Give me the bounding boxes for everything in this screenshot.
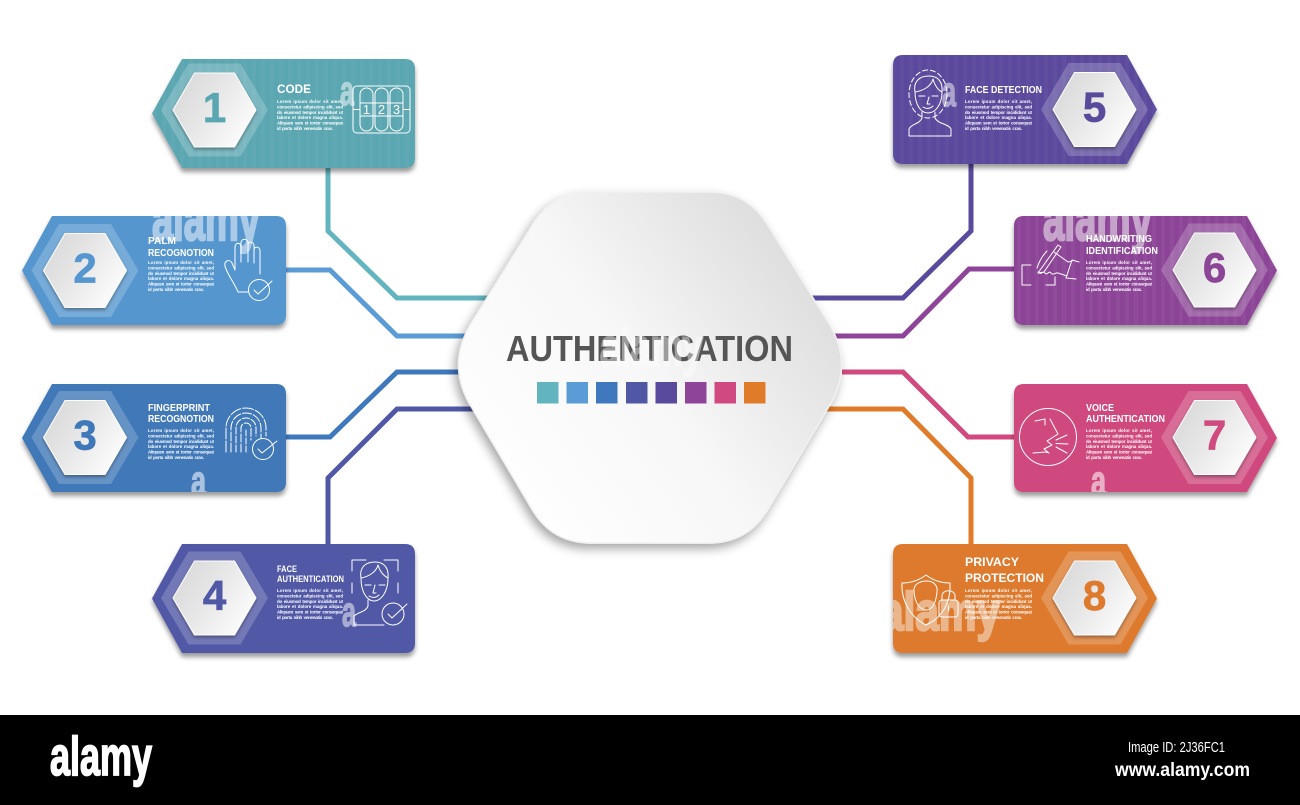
number badge 8: 8 <box>1083 572 1106 619</box>
connector 4 <box>328 409 480 544</box>
icon: speaking face <box>1020 408 1076 466</box>
title 6 <box>1086 234 1158 257</box>
body text 4: do eiusmod tempor incididunt ut <box>277 599 344 604</box>
body text 5: Aliquam sem et tortor consequat <box>965 121 1033 126</box>
body text 6: consectetur adipiscing elit, sed <box>1086 265 1152 270</box>
body text 1: Lorem ipsum dolor sit amet, <box>277 99 343 104</box>
card 2: palm recognition <box>20 216 289 332</box>
title 5: FACE DETECTION <box>965 84 1042 96</box>
body text 1: Aliquam sem et tortor consequat <box>277 121 344 126</box>
body text 8: consectetur adipiscing elit, sed <box>965 593 1032 598</box>
body text 1: consectetur adipiscing elit, sed <box>277 104 343 109</box>
body text 4: Aliquam sem et tortor consequat <box>277 610 344 615</box>
body text 7: labore et dolore magna aliqua. <box>1086 444 1152 449</box>
title 3: FINGERPRINT <box>148 403 210 414</box>
body text 6 <box>1086 260 1153 292</box>
body text 7 <box>1086 428 1153 460</box>
body text 5: Lorem ipsum dolor sit amet, <box>965 99 1032 104</box>
icon: face scan with check <box>352 560 407 625</box>
connector 5 <box>810 164 971 298</box>
body text 6: do eiusmod tempor incididunt ut <box>1086 271 1153 276</box>
body text 3: id porta nibh venenatis cras. <box>148 455 204 460</box>
icon: code lock: 1 <box>363 102 370 117</box>
title 2: PALM <box>148 236 176 247</box>
body text 3: Aliquam sem et tortor consequat <box>148 450 215 455</box>
watermark alamy: alamy <box>1043 185 1152 254</box>
number badge 6: 6 <box>1203 244 1226 291</box>
icon: face detection <box>909 70 951 136</box>
body text 3: labore et dolore magna aliqua. <box>148 444 214 449</box>
title 7 <box>1086 403 1165 425</box>
title 6: HANDWRITING <box>1086 234 1152 245</box>
title 8 <box>965 555 1044 585</box>
number badge 5: 5 <box>1083 84 1106 130</box>
watermark alamy: alamy <box>152 185 260 254</box>
body text 3: do eiusmod tempor incididunt ut <box>148 439 215 444</box>
main title: AUTHENTICATION <box>506 328 793 369</box>
central hexagon <box>458 192 842 543</box>
connector lines <box>286 164 1014 544</box>
body text 3: Lorem ipsum dolor sit amet, <box>148 428 214 433</box>
body text 4: labore et dolore magna aliqua. <box>277 604 343 609</box>
card 4: face authentication <box>152 544 415 653</box>
title 4: FACE <box>277 564 297 574</box>
body text 7: Aliquam sem et tortor consequat <box>1086 450 1153 455</box>
title 2: RECOGNOTION <box>148 248 214 259</box>
body text 4: consectetur adipiscing elit, sed <box>277 593 343 598</box>
body text 2: id porta nibh venenatis cras. <box>148 287 204 292</box>
connector 6 <box>830 269 1014 336</box>
body text 5: labore et dolore magna aliqua. <box>965 115 1032 120</box>
title 8: PROTECTION <box>965 571 1044 585</box>
body text 6: Aliquam sem et tortor consequat <box>1086 282 1153 287</box>
body text 1: do eiusmod tempor incididunt ut <box>277 110 344 115</box>
number badge 2 <box>32 224 138 317</box>
body text 2: consectetur adipiscing elit, sed <box>148 265 214 270</box>
footer bar <box>0 715 1300 805</box>
icon: palm with check <box>225 239 272 300</box>
card 3: fingerprint recognition <box>22 384 286 504</box>
body text 1: labore et dolore magna aliqua. <box>277 115 343 120</box>
number badge 3 <box>32 391 138 484</box>
body text 1 <box>277 99 344 131</box>
connector 7 <box>842 372 1014 437</box>
watermark alamy: alamy <box>600 319 703 377</box>
body text 3: consectetur adipiscing elit, sed <box>148 433 214 438</box>
body text 6: labore et dolore magna aliqua. <box>1086 276 1152 281</box>
website: www.alamy.com <box>1114 760 1250 781</box>
body text 4: Lorem ipsum dolor sit amet, <box>277 588 343 593</box>
body text 6: id porta nibh venenatis cras. <box>1086 287 1142 292</box>
body text 5 <box>965 99 1033 131</box>
body text 8: do eiusmod tempor incididunt ut <box>965 599 1033 604</box>
number badge 6 <box>1161 224 1268 316</box>
title 3: RECOGNOTION <box>148 414 214 425</box>
body text 8 <box>965 588 1033 620</box>
body text 4 <box>277 588 344 620</box>
body text 7: consectetur adipiscing elit, sed <box>1086 433 1152 438</box>
body text 7: id porta nibh venenatis cras. <box>1086 455 1142 460</box>
title 7: VOICE <box>1086 403 1114 414</box>
connector 8 <box>825 409 971 544</box>
icon: code lock: 3 <box>393 102 400 117</box>
watermark a: a <box>1091 457 1106 504</box>
title 4 <box>277 564 344 584</box>
title 7: AUTHENTICATION <box>1086 414 1165 425</box>
body text 8: Aliquam sem et tortor consequat <box>965 610 1033 615</box>
number badge 1: 1 <box>203 84 226 131</box>
body text 5: do eiusmod tempor incididunt ut <box>965 110 1033 115</box>
title 2 <box>148 236 214 259</box>
body text 2 <box>148 260 215 292</box>
watermark a: a <box>342 588 356 635</box>
connector 2 <box>286 270 475 336</box>
number badge 4 <box>161 552 268 644</box>
title 8: PRIVACY <box>965 555 1019 569</box>
body text 6: Lorem ipsum dolor sit amet, <box>1086 260 1152 265</box>
body text 5: consectetur adipiscing elit, sed <box>965 104 1032 109</box>
icon: code lock <box>353 86 410 133</box>
card 8: privacy protection <box>880 544 1157 653</box>
body text 2: labore et dolore magna aliqua. <box>148 276 214 281</box>
number badge 2: 2 <box>73 244 97 292</box>
card 6: handwriting identification <box>1011 216 1280 332</box>
body text 5: id porta nibh venenatis cras. <box>965 126 1022 131</box>
body text 7: Lorem ipsum dolor sit amet, <box>1086 428 1152 433</box>
number badge 4: 4 <box>203 572 227 619</box>
body text 1: id porta nibh venenatis cras. <box>277 126 333 131</box>
body text 2: Aliquam sem et tortor consequat <box>148 282 215 287</box>
watermark a: a <box>191 457 206 504</box>
footer logo: alamy <box>50 725 152 787</box>
body text 8: labore et dolore magna aliqua. <box>965 604 1032 609</box>
icon: code lock: 2 <box>378 102 385 117</box>
card 1: code <box>152 59 415 168</box>
watermark a: a <box>942 68 956 115</box>
body text 2: Lorem ipsum dolor sit amet, <box>148 260 214 265</box>
title 6: IDENTIFICATION <box>1086 246 1158 257</box>
icon: handwriting <box>1022 245 1079 285</box>
icon: fingerprint with check <box>226 408 277 460</box>
colour legend squares <box>537 382 766 404</box>
card 7: voice authentication <box>1014 384 1277 504</box>
title 4: AUTHENTICATION <box>277 574 344 584</box>
body text 3 <box>148 428 215 460</box>
number badge 3: 3 <box>73 412 97 458</box>
number badge 7: 7 <box>1203 412 1226 458</box>
card 5: face detection <box>893 55 1157 164</box>
body text 4: id porta nibh venenatis cras. <box>277 615 333 620</box>
body text 8: id porta nibh venenatis cras. <box>965 615 1022 620</box>
body text 7: do eiusmod tempor incididunt ut <box>1086 439 1153 444</box>
connector 1 <box>328 168 495 298</box>
connector 3 <box>286 372 465 437</box>
icon: shield and lock <box>902 575 958 625</box>
title 3 <box>148 403 214 425</box>
watermark alamy: alamy <box>880 582 1000 642</box>
image id: Image ID: 2J36FC1 <box>1128 739 1225 756</box>
number badge 5 <box>1041 63 1148 156</box>
body text 8: Lorem ipsum dolor sit amet, <box>965 588 1032 593</box>
number badge 1 <box>161 64 268 156</box>
number badge 8 <box>1041 552 1148 644</box>
watermark a: a <box>340 67 354 114</box>
body text 2: do eiusmod tempor incididunt ut <box>148 271 215 276</box>
number badge 7 <box>1161 391 1268 484</box>
title 1: CODE <box>277 82 311 96</box>
